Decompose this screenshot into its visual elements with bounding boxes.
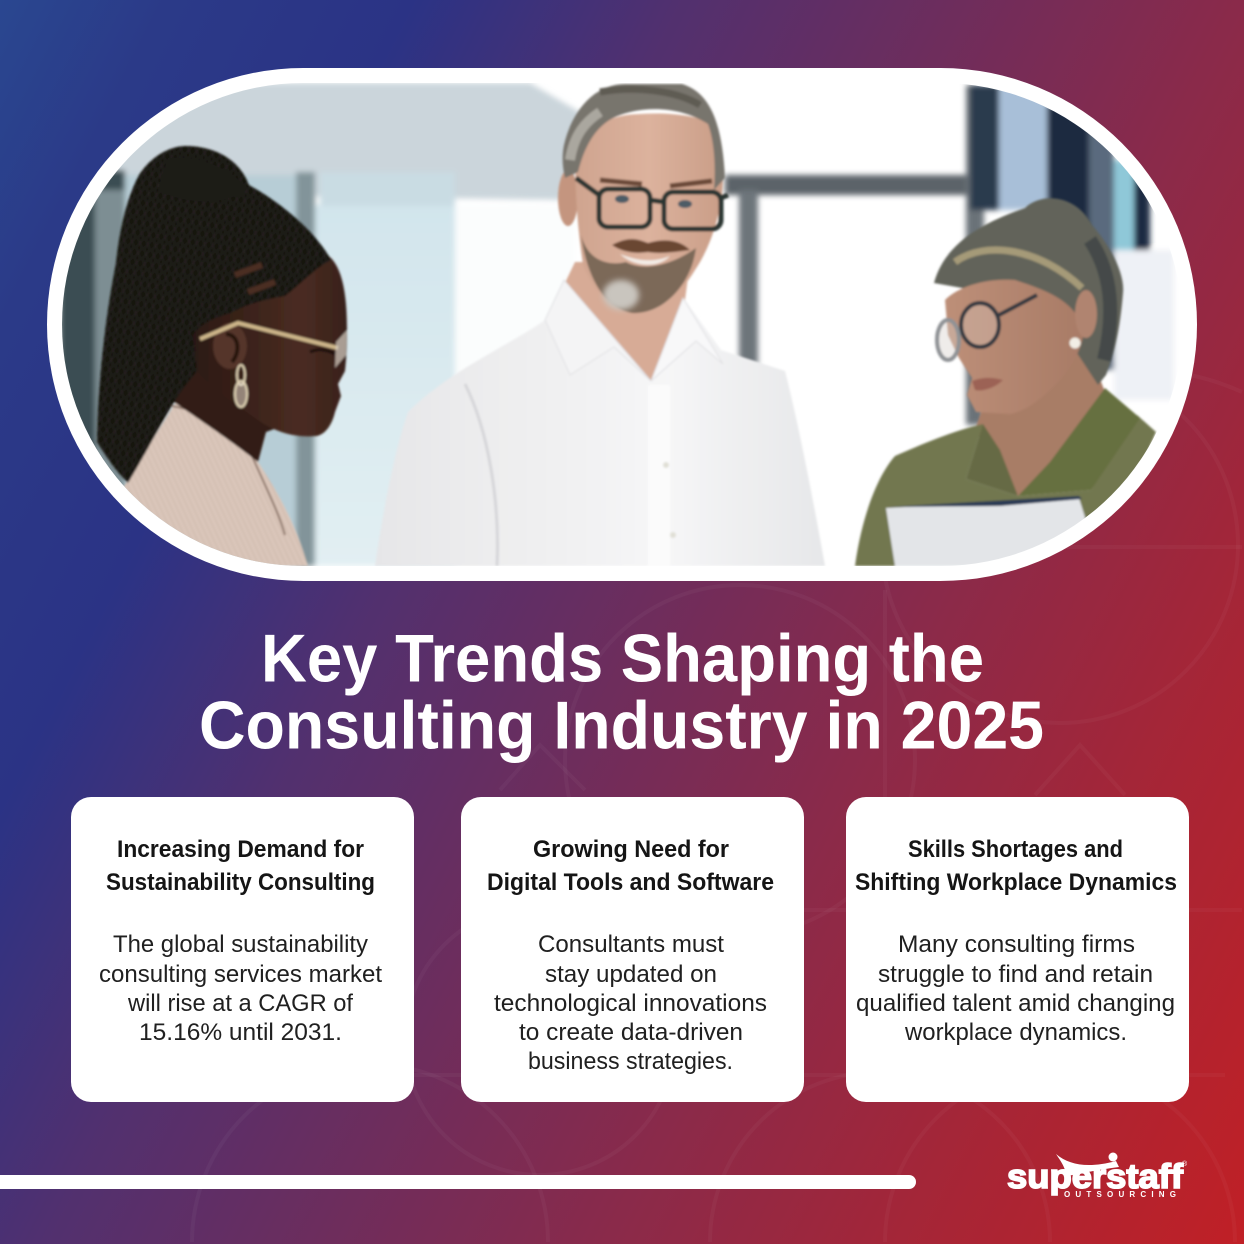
card body: Consultants must <box>538 931 724 958</box>
card body: struggle to find and retain <box>878 961 1153 988</box>
card body: The global sustainability <box>113 931 368 958</box>
card heading: Digital Tools and Software <box>487 869 774 896</box>
collar <box>545 280 651 381</box>
white shirt <box>376 322 825 566</box>
card body: 15.16% until 2031. <box>139 1019 342 1046</box>
person: man in white shirt <box>375 84 825 566</box>
ear <box>558 170 578 226</box>
title <box>199 620 1044 764</box>
footer bar <box>0 1175 916 1189</box>
folder <box>886 498 1085 566</box>
mustache <box>612 239 690 253</box>
neck <box>173 370 274 463</box>
card heading <box>855 836 1177 896</box>
card heading: Shifting Workplace Dynamics <box>855 869 1177 896</box>
glasses <box>576 178 728 229</box>
card heading: Skills Shortages and <box>908 836 1123 863</box>
card body: qualified talent amid changing <box>856 990 1175 1017</box>
card body: will rise at a CAGR of <box>127 990 353 1017</box>
card heading <box>487 836 774 896</box>
eyes <box>615 195 629 203</box>
card heading <box>106 836 375 896</box>
ear <box>213 323 247 369</box>
card body <box>856 931 1175 1046</box>
neck <box>975 340 1105 496</box>
card: digital tools <box>461 797 804 1102</box>
braided hair <box>97 146 331 483</box>
card body: business strategies. <box>528 1048 733 1075</box>
card body: workplace dynamics. <box>904 1019 1127 1046</box>
card heading: Growing Need for <box>533 836 729 863</box>
card: sustainability consulting <box>71 797 414 1102</box>
eyebrows <box>600 180 712 186</box>
logo: superstaff outsourcing: superstaff <box>1007 1158 1184 1196</box>
title: Consulting Industry in 2025 <box>199 688 1044 764</box>
hair back <box>934 198 1123 385</box>
neck <box>564 262 690 381</box>
card body: technological innovations <box>494 990 767 1017</box>
mouth <box>972 378 1003 391</box>
glasses <box>937 295 1037 360</box>
earring <box>237 365 245 385</box>
card body: to create data-driven <box>519 1019 743 1046</box>
logo: superstaff outsourcing: ® <box>1182 1160 1188 1168</box>
person: woman with braids <box>97 146 347 566</box>
hair <box>563 84 725 190</box>
title: Key Trends Shaping the <box>261 620 984 696</box>
smile <box>620 254 670 265</box>
earring <box>1070 338 1080 348</box>
person: woman with folder <box>855 198 1156 566</box>
face <box>945 280 1084 414</box>
photo frame <box>47 68 1197 581</box>
card: skills shortages <box>846 797 1189 1102</box>
card body <box>494 931 767 1075</box>
face <box>193 249 347 436</box>
card body: consulting services market <box>99 961 382 988</box>
photo: three consultants in an office <box>60 83 1182 570</box>
ear <box>1075 290 1097 338</box>
card body: stay updated on <box>545 961 717 988</box>
logo: superstaff outsourcing: OUTSOURCING <box>1064 1190 1176 1199</box>
olive shirt <box>855 415 1156 566</box>
card body: Many consulting firms <box>898 931 1135 958</box>
card heading: Sustainability Consulting <box>106 869 375 896</box>
card body <box>99 931 382 1046</box>
background line pattern <box>192 367 1242 1242</box>
office background <box>60 83 1174 570</box>
sweater <box>124 401 308 566</box>
face <box>574 112 724 282</box>
glasses <box>200 323 338 348</box>
beard <box>581 235 696 313</box>
card heading: Increasing Demand for <box>117 836 364 863</box>
